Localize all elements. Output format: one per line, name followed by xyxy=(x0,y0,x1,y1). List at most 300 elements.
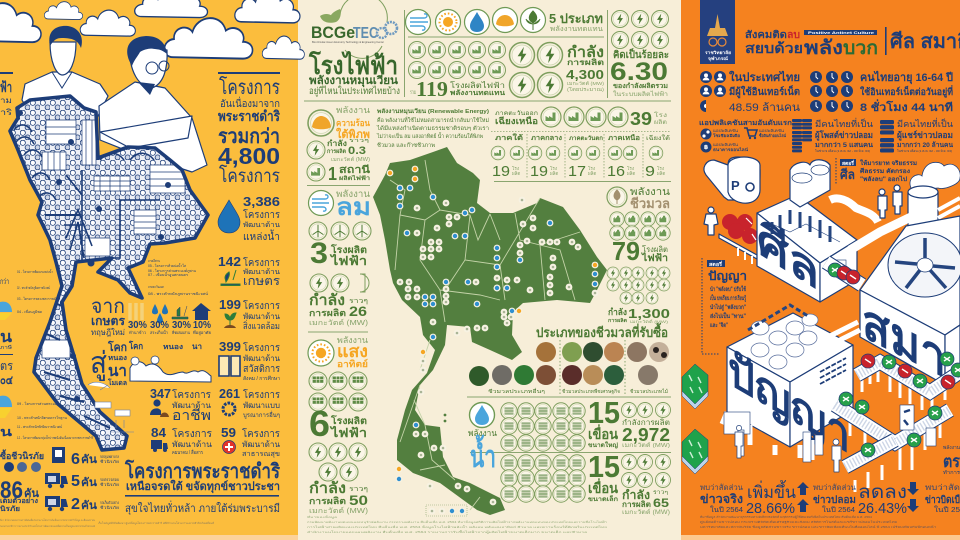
region counts: 17 xyxy=(568,163,586,180)
geothermal: ความร้อน xyxy=(336,118,371,128)
stat: water projects: แหล่งน้ำ xyxy=(243,229,280,243)
stat: 119 plants: รวม xyxy=(410,89,416,96)
definition text: ได้มีแหล่งกำเนิดตามธรรมชาติรอบๆ ตัวเรา xyxy=(376,125,489,132)
biomass types: ประเภทของชีวมวลที่รับซื้อ xyxy=(536,322,668,340)
list: top three apps: แอปพลิเคชัน xyxy=(759,128,784,133)
illustration: red balls on tray xyxy=(719,214,758,264)
region counts: 19 xyxy=(492,163,510,180)
list: top three apps: แอปพลิเคชัน xyxy=(713,142,738,147)
geothermal xyxy=(307,105,371,184)
regional project lists: 08 - พระตำหนักภูพานราชนิเวศน์ xyxy=(148,292,209,296)
geothermal: ใต้พิภพ xyxy=(336,127,370,141)
stat: true news increase: ข่าวจริง xyxy=(700,492,743,506)
footnote: cream poster: กรมพัฒนาพลังงานทดแทนและอนุรักษ์พลังงาน กระทรวงพลังงาน สืบค้นเมื่อ พ.ศ. 2564 ที่มาข้อมูลสถิติการผลิตไฟฟ้าจากพลังงานทดแทนของประเทศไทยและรายชื่อโรงไฟฟ้า xyxy=(307,520,608,525)
biomass: ชีวมวล xyxy=(630,196,670,211)
section: mobile vehicles: คัน xyxy=(81,476,98,489)
regional project lists: ภาคตะวันออก xyxy=(148,285,164,289)
region counts: โรง xyxy=(627,165,634,171)
definition text: ชีวมวล และก๊าซชีวภาพ xyxy=(377,142,435,149)
regional project lists: 11 - พระตำหนักทักษิณราชนิเวศน์ xyxy=(17,425,62,429)
stat: health projects: พัฒนาด้าน xyxy=(242,440,281,449)
left cropped column xyxy=(0,72,44,513)
regional project lists: 02 - พระตำหนักภูพิงคราชนิเวศน์ xyxy=(17,286,50,290)
stat: five types: 5 ประเภท xyxy=(549,11,603,26)
green bundles left xyxy=(682,364,708,474)
dam grid small xyxy=(501,455,585,502)
section: from agriculture: 30% xyxy=(172,320,191,331)
title: อยู่ที่ไหนในประเทศไทยบ้าง xyxy=(309,84,400,97)
stat: transport projects xyxy=(151,425,213,456)
footnote: orange poster: ศูนย์ต่อต้านข่าวปลอม กระทรวงดิจิทัลเพื่อเศรษฐกิจและสังคม สถิติการโพสต์และแชร์ข่าวปลอมในประเทศไทย xyxy=(700,520,898,524)
stat: 119 plants: 119 xyxy=(416,77,448,101)
region counts: ผลิต xyxy=(627,171,635,176)
region: northeast: 39 xyxy=(630,109,652,129)
logo: Chulabhorn Royal Academy: จุฬาภรณ์ xyxy=(708,55,728,62)
title: society xyxy=(745,27,960,59)
section: from agriculture: ทฤษฎีใหม่ xyxy=(91,328,125,337)
headline right column xyxy=(218,72,280,187)
regional project lists: 04 - เขื่อนภูมิพล xyxy=(17,309,42,314)
definition text: พลังงานหมุนเวียน (Renewable Energy) xyxy=(377,108,489,115)
stat: fake news decrease: พบว่าสัดส่วน xyxy=(813,483,857,492)
callout: story sila xyxy=(836,158,917,184)
large bolt icons xyxy=(510,42,562,98)
region counts: โรง xyxy=(657,165,664,171)
stat: 119 plants xyxy=(410,77,505,101)
section: mobile vehicles: ชีวนิรภัย xyxy=(100,482,119,487)
solar xyxy=(308,335,368,515)
callout: story panya: ส่งไปเป็น "ทาน" xyxy=(710,311,746,320)
section: khok nong na model: นา xyxy=(192,342,202,351)
geothermal: การผลิต xyxy=(327,148,346,155)
section: khok nong na model: หนอง xyxy=(163,344,184,351)
map markers xyxy=(387,166,598,516)
stat: fake news decrease: ลดลง xyxy=(858,482,907,503)
hydro: พลังงาน xyxy=(468,428,497,438)
illustration: chimney and smoke xyxy=(908,162,960,236)
region counts: ผลิต xyxy=(512,171,520,176)
regional project lists: 07 - เขื่อนน้ำอูนสกลนคร xyxy=(148,272,188,277)
stat: small dams: เขื่อน xyxy=(588,478,618,496)
stat: fake news decrease: ในปี 2564 xyxy=(822,505,855,514)
stat: internet users: มีผู้ใช้อินเทอร์เน็ต xyxy=(729,84,800,99)
region counts xyxy=(491,132,671,180)
wind: 26 xyxy=(349,303,367,319)
biomass: กำลัง xyxy=(608,307,627,317)
geothermal: สถานี xyxy=(339,164,370,176)
stat: large dams: 15 xyxy=(588,395,620,430)
footnote: orange poster: มหาวิทยาลัยและสถาบันวิจัย ข้อมูลสัดส่วนข่าวจริง ข่าวปลอม และข่าวบิดเบือนที่พบในสื่อออนไลน์ ปี 2564 เปรียบเทียบกับปีก่อนหน้า xyxy=(700,525,937,529)
stat: welfare projects: สวัสดิการ xyxy=(243,364,281,375)
biomass types: ชีวมวลประเภทอื่นๆ xyxy=(488,388,545,395)
title: society: สังคมติด xyxy=(745,29,787,41)
biomass types: ชีวมวลประเภทไม้ xyxy=(630,388,668,395)
left cropped column: เต็มตัวอย่าง xyxy=(0,496,39,505)
footnote: yellow poster: ที่มา: สำนักงานคณะกรรมการพิเศษเพื่อประสานงานโครงการอันเนื่องมาจากพระราชดำริ ข้อมูล ณ เดือนมกราคม xyxy=(0,518,95,522)
stat: 119 plants: พลังงานทดแทน xyxy=(450,89,505,97)
wind: 3 xyxy=(310,237,328,270)
stat: 119 plants: โรงผลิตไฟฟ้า xyxy=(450,81,505,90)
region: northeast: ภาคตะวันออก xyxy=(495,110,538,117)
left cropped column: าม xyxy=(0,96,12,105)
logo: Chulabhorn Royal Academy xyxy=(700,0,735,64)
stat: small dams: เมกะวัตต์ (MW) xyxy=(622,508,670,516)
illustration: P cylinder xyxy=(704,157,760,203)
stat: fake news sharers: ในช่วง 9 เดือน (1 ต.ค. 62 - 30 มิ.ย. 63) xyxy=(897,148,952,153)
logo: BCGeTEC xyxy=(311,0,397,58)
left cropped column: 86 xyxy=(0,477,23,504)
solar: 6 xyxy=(309,403,330,444)
wind: เมกะวัตต์ (MW) xyxy=(309,319,368,327)
left cropped column: น xyxy=(0,425,13,439)
stat: fake news sharers: มากกว่า 20 ล้านคน xyxy=(897,140,954,149)
stat: welfare projects: 399 xyxy=(219,339,241,354)
geothermal: ราวๆ xyxy=(349,138,370,144)
section: from agriculture: ทำนาข้าว xyxy=(129,330,146,335)
region counts: ผลิต xyxy=(588,171,596,176)
left cropped column: นิรภัย xyxy=(0,505,20,513)
biomass types xyxy=(469,322,669,395)
region counts: ภาคใต้ xyxy=(495,133,524,142)
stat: fake news sharers xyxy=(880,117,954,153)
stat: health projects: 59 xyxy=(221,425,236,440)
title: society: ลบ xyxy=(787,30,800,41)
stat: small dams: 65 xyxy=(653,496,669,510)
section: mobile vehicles xyxy=(45,447,119,513)
biomass: การผลิต xyxy=(608,317,627,324)
stat: water projects: พัฒนาด้าน xyxy=(243,221,280,229)
section: from agriculture: 30% xyxy=(128,320,147,331)
section: mobile vehicles: รถปฐมพยาบาล xyxy=(100,454,119,459)
wind: พลังงาน xyxy=(336,189,371,200)
section: khok nong na model: โคก xyxy=(128,340,143,351)
title: society: บวก xyxy=(843,38,878,59)
solar: ราวๆ xyxy=(349,486,368,493)
solar: กำลัง xyxy=(309,480,346,497)
stat: capacity 4,300: กำลัง xyxy=(567,44,604,61)
stat: hours online: ใช้อินเทอร์เน็ตต่อวันอยู่ที่ xyxy=(860,84,953,99)
section: khok nong na model: โคก xyxy=(107,340,127,354)
solar: เมกะวัตต์ (MW) xyxy=(309,507,368,515)
stat: large dams: เมกะวัตต์ (MW) xyxy=(622,442,670,449)
regional project lists: 12 - โครงการพัฒนาลุ่มน้ำปากพนังอันเนื่องมาจากพระราชดำริ xyxy=(17,435,93,441)
stat: large dams xyxy=(588,395,670,449)
biomass: 1,300 xyxy=(628,306,670,321)
solar: 50 xyxy=(349,492,368,508)
stat: integrated projects: พัฒนาแบบ xyxy=(243,401,280,410)
list: top three apps: ธนาคารออนไลน์ xyxy=(713,147,749,152)
list: top three apps: โซเชียลมีเดีย xyxy=(712,133,740,138)
stat: true news increase: เพิ่มขึ้น xyxy=(747,480,796,502)
geothermal: เมกะวัตต์ (MW) xyxy=(331,156,370,163)
region counts: ภาคตะวันตก xyxy=(569,135,604,142)
illustration: sila building xyxy=(757,160,878,302)
headline right column: โครงการ xyxy=(219,164,280,187)
stat: fake news posters: มากกว่า 5 แสนคน xyxy=(815,141,874,149)
logo: BCGeTEC: BCGe xyxy=(311,23,355,42)
callout: story panya: และ "จิต" xyxy=(710,321,728,329)
headline right column: โครงการ xyxy=(219,76,280,99)
section: mobile vehicles: 6 xyxy=(71,451,80,468)
closing headline xyxy=(124,459,280,515)
regional project lists xyxy=(17,258,209,441)
stat: five types xyxy=(549,11,603,33)
dividers xyxy=(304,10,671,453)
small bolts and 6.30 percent: ของกำลังผลิตรวม xyxy=(613,82,668,90)
illustration: samadhi building: สมา xyxy=(862,292,946,389)
small bolts and 6.30 percent: 6.30 xyxy=(610,58,668,86)
geothermal: ผลิตไฟฟ้า xyxy=(339,174,370,182)
hydro: น้ำ xyxy=(470,434,496,474)
factory grid xyxy=(408,42,506,78)
section: mobile vehicles: ชีวนิรภัย xyxy=(100,459,119,464)
map: Thailand power plants xyxy=(373,147,607,515)
definition text: ไม่ว่าจะเป็น ลม แสงอาทิตย์ น้ำ ความร้อนใต้พิภพ xyxy=(376,132,483,140)
panel: positive internet orange poster xyxy=(681,0,960,540)
balls on conveyors xyxy=(828,263,960,457)
stat: hours online: 8 ชั่วโมง 44 นาที xyxy=(860,99,953,114)
stat: internet users xyxy=(700,70,801,114)
biomass: โรงผลิต xyxy=(642,245,668,254)
list: top three apps: แอปพลิเคชันสามอันดับแรก xyxy=(699,119,792,127)
stat: fake news decrease: 26.43% xyxy=(858,500,907,517)
headline right column: พระราชดำริ xyxy=(218,108,280,124)
section: mobile vehicles: รถเก็บตัวอย่าง xyxy=(100,499,119,505)
stat: water projects: 3,386 xyxy=(243,194,280,209)
stat: true news increase: 28.66% xyxy=(746,500,795,517)
cropped label: verify: พลังงาน xyxy=(943,445,960,451)
callout: story sila: "พลังลบ" ออกไป xyxy=(860,175,907,183)
left cropped column: าริ xyxy=(0,108,13,117)
stat: agriculture projects: โครงการ xyxy=(243,256,281,269)
section: khok nong na model: สู่ xyxy=(90,347,107,381)
title: society: พลัง xyxy=(804,38,843,59)
section: from agriculture: จาก xyxy=(91,296,125,318)
callout: story panya: นำ "พลังลบ" ปรับใช้ xyxy=(710,285,746,293)
stat: transport projects: โครงการ xyxy=(172,427,213,440)
region counts: ภาคกลาง xyxy=(531,135,562,142)
stat: fake news decrease: ข่าวปลอม xyxy=(813,494,856,506)
regional project lists: 01 - โครงการพัฒนาแหล่งน้ำ xyxy=(17,269,53,274)
section: mobile vehicles: 5 xyxy=(71,473,80,490)
left cropped column: กว่า xyxy=(0,277,9,286)
stat: distorted news cropped: ในปี 25 xyxy=(934,505,960,514)
biomass: เมกะวัตต์ (MW) xyxy=(630,319,669,324)
stat: hours online: คนไทยอายุ 16-64 ปี xyxy=(860,70,953,85)
stat: fake news sharers: ผู้แชร์ข่าวปลอม xyxy=(897,130,953,141)
left cropped column: ตร xyxy=(0,359,13,373)
stat: fake news posters: มีคนไทยที่เป็น xyxy=(815,117,873,129)
headline right column: รวมกว่า xyxy=(218,126,280,148)
stat: capacity 4,300: การผลิต xyxy=(567,58,604,67)
region counts: 19 xyxy=(530,163,548,180)
stat: small dams: ขนาดเล็ก xyxy=(588,494,618,503)
footnote: yellow poster: เว็บไซต์มูลนิธิชัยพัฒนา ศูนย์ข้อมูลโครงการพระราชดำริ สถิติจำนวนโครงการและรถชีวนิรภัยเคลื่อนที่ xyxy=(98,520,214,525)
logo: Chulabhorn Royal Academy: ราชวิทยาลัย xyxy=(705,50,732,55)
stat: small dams: กำลัง xyxy=(622,488,650,502)
callout: story sila: สตอรี่ xyxy=(842,159,854,167)
callout: story panya: นำไปสู่ "พลังบวก" xyxy=(710,303,746,312)
list: top three apps: ฿ xyxy=(704,144,708,151)
callout: story panya: ปัญญา xyxy=(708,269,747,283)
stat: agriculture projects: เกษตร xyxy=(243,274,281,288)
stat: internet users: 48.59 ล้านคน xyxy=(729,102,801,114)
region: northeast: โรง xyxy=(654,111,667,119)
region counts: ผลิต xyxy=(657,171,665,176)
illustration: conveyors xyxy=(826,262,960,492)
stat: capacity 4,300: (โดยประมาณ) xyxy=(567,86,605,92)
region counts: 16 xyxy=(607,163,625,180)
stat: environment projects xyxy=(219,297,281,331)
region counts: โรง xyxy=(588,165,595,171)
biomass types: ชีวมวลประเภทพืชเศรษฐกิจ xyxy=(562,388,620,395)
stat: fake news sharers: มีคนไทยที่เป็น xyxy=(897,117,953,129)
stat: fake news decrease xyxy=(813,482,919,517)
geothermal: พลังงาน xyxy=(336,105,370,115)
section: mobile vehicles: รถตรวจสอบ xyxy=(100,477,119,482)
regional project lists: 05 - โครงการห้วยบ่อน้ำใส xyxy=(148,263,187,268)
stat: health projects: สาธารณสุข xyxy=(242,451,280,458)
illustration: young king xyxy=(22,26,108,130)
illustration: panya building: ปัญญา xyxy=(728,341,850,465)
stat: transport projects: คมนาคม / สื่อสาร xyxy=(172,449,203,456)
section: from agriculture xyxy=(91,296,211,337)
wind: โรงผลิต xyxy=(330,244,367,256)
illustration: P cylinder: P xyxy=(731,178,740,193)
left cropped column: น xyxy=(0,329,12,346)
wind: ราวๆ xyxy=(349,298,368,305)
closing headline: สุขใจไทยทั่วหล้า ภายใต้ร่มพระบารมี xyxy=(125,500,280,515)
stat: occupation projects: โครงการ xyxy=(172,388,212,401)
stat: environment projects: โครงการ xyxy=(243,299,281,312)
stat: true news increase xyxy=(700,480,809,517)
solar: โรงผลิต xyxy=(330,415,367,427)
region counts: 9 xyxy=(645,163,655,180)
stat: transport projects: 84 xyxy=(151,425,167,440)
stat: capacity 4,300: เมกะวัตต์ (MW) xyxy=(567,80,605,86)
wind: กำลัง xyxy=(309,292,345,309)
stat: agriculture projects xyxy=(218,254,281,288)
footnote: yellow poster: กองบรรณาธิการ รายงานประจำปี และโครงการพัฒนาชนบทเพื่อความเป็นอยู่ของประชาชนทั่วประเทศ xyxy=(0,523,95,528)
stat: fake news posters: ในช่วง 9 เดือน (1 ต.ค. 62 - 30 มิ.ย. 63) xyxy=(815,148,870,153)
list: top three apps: แอปพลิเคชัน xyxy=(713,128,738,133)
stat: environment projects: พัฒนาด้าน xyxy=(243,312,281,321)
stat: large dams: ขนาดใหญ่ xyxy=(588,441,618,449)
stat: health projects: โครงการ xyxy=(242,427,281,440)
stat: fake news posters xyxy=(792,117,874,153)
section: mobile vehicles: คัน xyxy=(81,499,98,512)
wind: การผลิต xyxy=(309,308,346,318)
regional project lists: 06 - โครงการส่วนพระองค์ภูพาน xyxy=(148,268,197,273)
title: society: สยบด้วย xyxy=(745,40,803,56)
footnote: yellow poster xyxy=(0,518,214,528)
section: from agriculture: สระเก็บน้ำ xyxy=(150,328,168,335)
region counts: โรง xyxy=(550,165,557,171)
illustration: sila building: ศีล xyxy=(757,211,819,301)
solar: แสง xyxy=(337,342,368,361)
stat: true news increase: ในปี 2564 xyxy=(710,505,743,514)
section: from agriculture: 10% xyxy=(193,320,211,331)
stat: large dams: กำลังการผลิต xyxy=(622,418,670,427)
headline right column: อันเนื่องมาจาก xyxy=(220,96,280,110)
callout: story panya: เป็น บทเรียน การเรียนรู้ xyxy=(710,293,746,303)
stat: agriculture projects: พัฒนาด้าน xyxy=(243,268,280,276)
geothermal: กำลัง xyxy=(327,139,347,148)
geothermal: 1 xyxy=(328,164,337,184)
stat: integrated projects: 261 xyxy=(219,386,240,401)
biomass: 79 xyxy=(612,236,640,266)
callout: story sila: ศีลธรรม คัดกรอง xyxy=(860,167,910,175)
regional project lists: ภาคอีสาน xyxy=(148,258,160,263)
stat: welfare projects: พัฒนาด้าน xyxy=(243,354,281,363)
biomass: ไฟฟ้า xyxy=(641,252,668,264)
title: โรงไฟฟ้า xyxy=(308,50,398,80)
footnote: cream poster: สำนักงานนโยบายและแผนพลังงาน สืบค้นเมื่อ พ.ศ. 2564 รายงานการรับซื้อไฟฟ้าจากผู้ผลิตไฟฟ้าขนาดเล็กมาก ขนาดเล็ก และชีวมวล xyxy=(307,529,588,534)
section: khok nong na model: นา xyxy=(108,363,127,380)
stat: true news increase: พบว่าสัดส่วน xyxy=(700,483,744,492)
illustration: workers right xyxy=(878,185,902,218)
small bolts and 6.30 percent: ในระบบผลิตไฟฟ้า xyxy=(613,90,668,98)
section: from agriculture: 30% xyxy=(150,320,169,331)
energy type icons xyxy=(406,8,546,34)
regional project lists: 03 - โครงการหลวงพระราชดำริ xyxy=(17,296,59,301)
illustration: worker left xyxy=(704,207,718,235)
cropped label: verify: ทำการ xyxy=(943,469,960,475)
illustration: samadhi building xyxy=(850,215,960,389)
stat: small dams: ราวๆ xyxy=(653,490,668,496)
left cropped column: ซื้อชีวนิรภัย xyxy=(0,449,44,461)
stat: integrated projects xyxy=(219,386,281,419)
stat: small dams: การผลิต xyxy=(622,500,651,509)
stat: occupation projects xyxy=(150,386,212,423)
dam grid large xyxy=(501,403,585,451)
stat: hours online xyxy=(810,70,953,114)
stat: capacity 4,300: 4,300 xyxy=(566,67,604,82)
stat: occupation projects: อาชีพ xyxy=(172,407,211,423)
footnote: orange poster: ที่มาข้อมูล สำนักงานพัฒนาธุรกรรมทางอิเล็กทรอนิกส์ พฤติกรรมผู้ใช้อินเทอร์เน็ตในประเทศไทย สืบค้นเมื่อ พ.ศ. 2564 xyxy=(700,514,873,520)
left cropped column: คัน xyxy=(24,487,39,500)
logo: BCGeTEC: Bio-Circular-Green Economy Technology & Engineering Center xyxy=(312,41,384,44)
section: khok nong na model xyxy=(90,340,211,387)
stat: internet users: ในประเทศไทย xyxy=(729,70,800,84)
definition text: คือ พลังงานที่ใช้ไม่หมดสามารถนำกลับมาใช้ใหม่ xyxy=(377,116,489,124)
callout: story panya xyxy=(702,258,747,354)
region: northeast xyxy=(495,107,667,129)
stat: welfare projects: สังคม / การศึกษา xyxy=(243,375,280,382)
region: northeast: ผลิต xyxy=(654,119,667,126)
section: from agriculture: พืชผสมผสาน xyxy=(172,330,190,335)
geothermal: 0.3 xyxy=(348,145,366,157)
illustration: coast line drawings xyxy=(88,382,134,432)
solar: อาทิตย์ xyxy=(337,358,368,369)
stat: large dams: 2,972 xyxy=(622,425,670,445)
region counts: เฉียงใต้ xyxy=(646,134,670,142)
stat: water projects: โครงการ xyxy=(243,208,281,221)
stat: capacity 4,300 xyxy=(566,44,605,92)
title: society: Positive Antinet Culture xyxy=(808,30,875,35)
section: mobile vehicles: คัน xyxy=(81,453,98,466)
solar: พลังงาน xyxy=(337,335,368,345)
callout: story sila: ให้มารยาท จริยธรรม xyxy=(860,159,917,167)
stat: large dams: เขื่อน xyxy=(588,424,618,442)
stat: health projects xyxy=(221,425,281,458)
title: พลังงานหมุนเวียน xyxy=(309,74,399,88)
small bolts and 6.30 percent xyxy=(610,10,669,98)
list: top three apps: ซื้อสินค้าออนไลน์ xyxy=(759,132,786,138)
region counts: ผลิต xyxy=(550,171,558,176)
footnote: orange poster xyxy=(700,514,937,529)
stat: five types: พลังงานทดแทน xyxy=(550,25,603,33)
